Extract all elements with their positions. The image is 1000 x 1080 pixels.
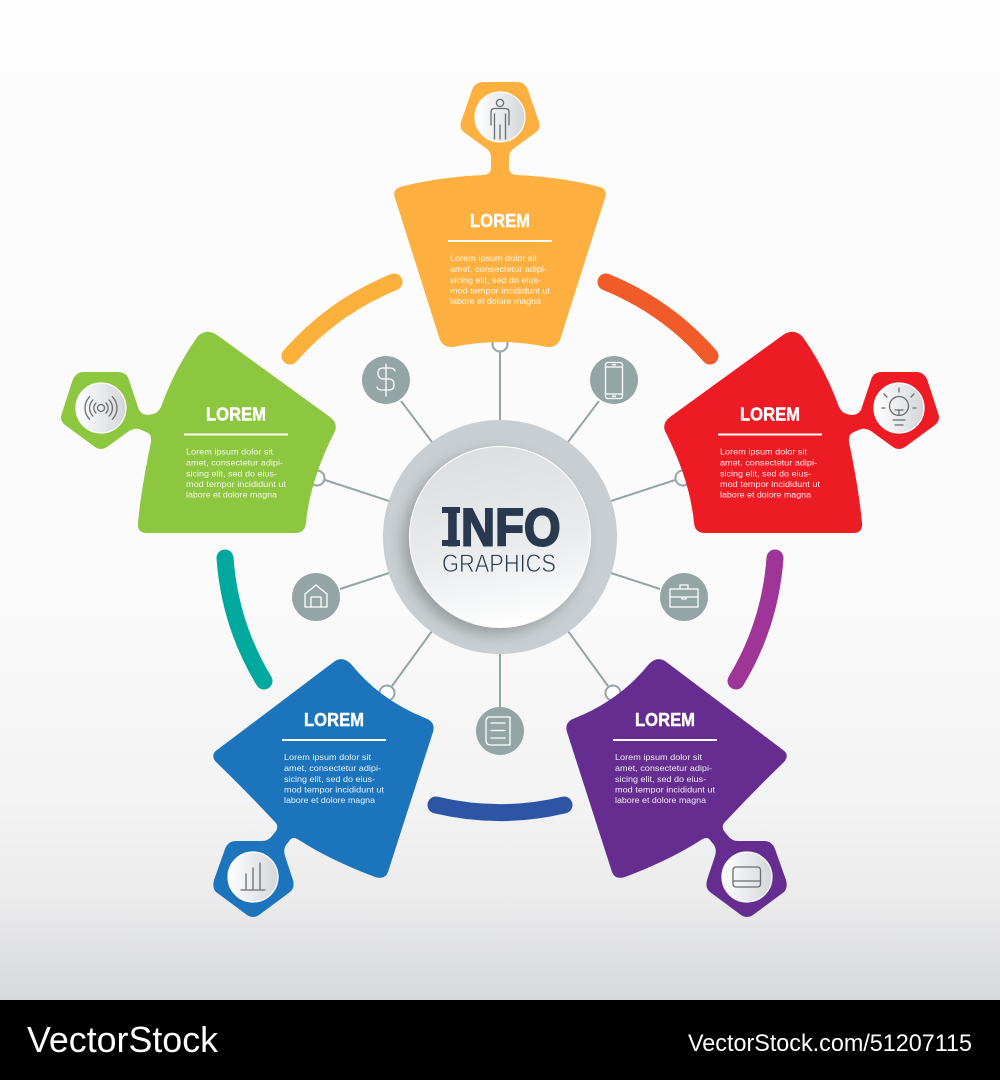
center disc [383, 420, 617, 654]
icon: tablet [722, 852, 772, 902]
icon: document [476, 707, 524, 755]
panel: left green [61, 332, 336, 533]
red panel text: mod tempor incididunt ut [720, 479, 821, 489]
panel: right red [664, 332, 939, 533]
purple panel text: mod tempor incididunt ut [615, 784, 716, 794]
title: INFO: NFO [461, 498, 561, 557]
icon: briefcase [660, 573, 708, 621]
blue panel text: LOREM [304, 709, 364, 730]
orange panel text: LOREM [470, 210, 530, 231]
purple panel text: amet, consectetur adipi- [615, 763, 712, 773]
icon: signal [76, 383, 126, 433]
green panel text [184, 404, 288, 500]
purple panel text: Lorem ipsum dolor sit [615, 752, 703, 762]
footer brand: VectorStock [27, 1019, 219, 1060]
connector spokes and rings [310, 336, 690, 708]
blue panel text: sicing elit, sed do eius- [284, 774, 375, 784]
blue panel text: labore et dolore magna [284, 795, 375, 805]
purple panel text: LOREM [635, 709, 695, 730]
icon: light bulb [874, 383, 924, 433]
red panel text [718, 404, 822, 500]
footer image id: VectorStock.com/51207115 [688, 1030, 972, 1057]
blue panel text: amet, consectetur adipi- [284, 763, 381, 773]
icon: bar chart [228, 852, 278, 902]
inner disc [410, 446, 590, 628]
blue panel text [282, 709, 386, 805]
panel: top orange [394, 82, 606, 347]
subtitle: GRAPHICS: GRAPHICS [442, 550, 556, 578]
red panel text: LOREM [740, 404, 800, 424]
green panel text: sicing elit, sed do eius- [186, 468, 277, 478]
footer bar [0, 1000, 1000, 1080]
arc: yellow [290, 282, 394, 356]
purple panel text: labore et dolore magna [615, 795, 706, 805]
orange panel shape [394, 82, 606, 347]
green panel text: labore et dolore magna [186, 490, 277, 500]
icon: dollar [362, 356, 410, 404]
orange panel text: mod tempor incididunt ut [450, 286, 551, 296]
orange panel text: sicing elit, sed do eius- [450, 275, 541, 285]
arc: orange [606, 282, 710, 356]
green panel shape [61, 332, 336, 533]
green panel text: Lorem ipsum dolor sit [186, 446, 274, 456]
green panel text: amet, consectetur adipi- [186, 458, 283, 468]
icon: house [292, 573, 340, 621]
green panel text: LOREM [206, 404, 266, 424]
orange panel text: labore et dolore magna [450, 296, 541, 306]
purple panel shape [566, 659, 787, 917]
orange panel text [448, 210, 552, 306]
blue panel text: Lorem ipsum dolor sit [284, 752, 372, 762]
red panel text: labore et dolore magna [720, 490, 811, 500]
purple panel text [613, 709, 717, 805]
panel: bottom-right purple [566, 659, 787, 917]
red panel shape [664, 332, 939, 533]
red panel text: sicing elit, sed do eius- [720, 468, 811, 478]
arc: magenta [736, 558, 775, 681]
arc: navy blue [436, 805, 564, 813]
arc: teal [225, 558, 264, 681]
red panel text: amet, consectetur adipi- [720, 458, 817, 468]
icon: smartphone [590, 356, 638, 404]
outer ring [383, 420, 617, 654]
icon: person [475, 92, 525, 142]
green panel text: mod tempor incididunt ut [186, 479, 287, 489]
blue panel shape [213, 659, 434, 917]
red panel text: Lorem ipsum dolor sit [720, 446, 808, 456]
orange panel text: Lorem ipsum dolor sit [450, 253, 538, 263]
blue panel text: mod tempor incididunt ut [284, 784, 385, 794]
orange panel text: amet, consectetur adipi- [450, 264, 547, 274]
panel: bottom-left blue [213, 659, 434, 917]
purple panel text: sicing elit, sed do eius- [615, 774, 706, 784]
title: INFO: I [446, 498, 459, 557]
